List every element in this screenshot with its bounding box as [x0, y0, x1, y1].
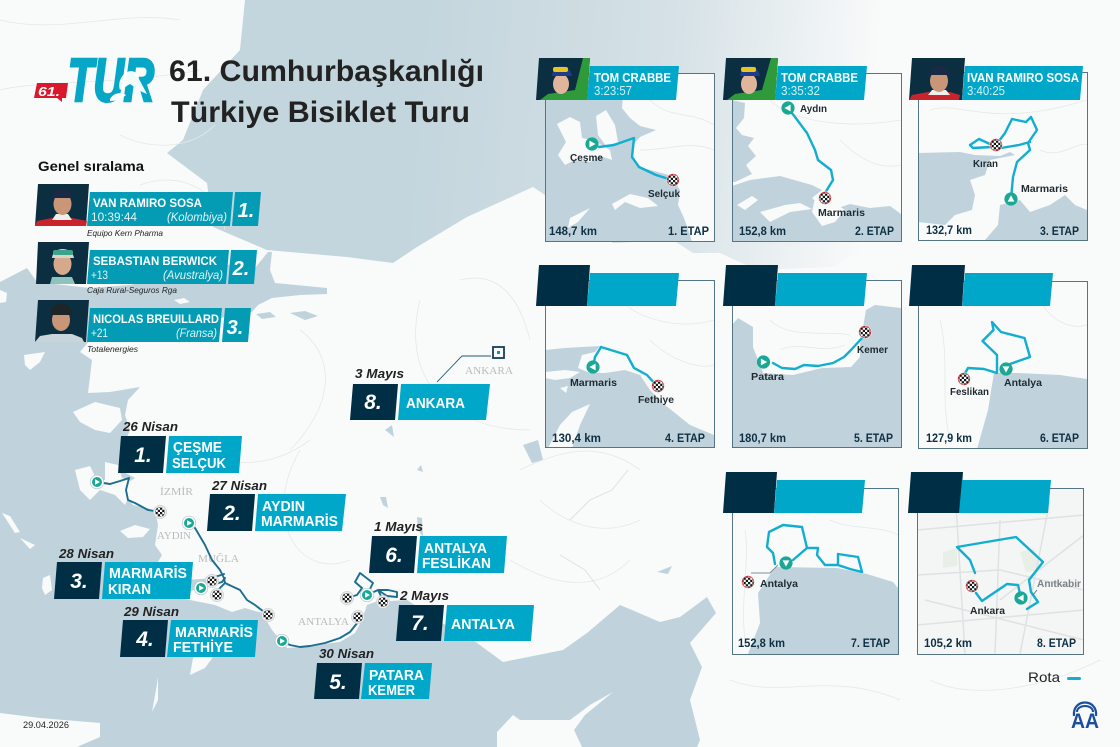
route: Patara to Kemer: [773, 338, 862, 369]
callout: stage 5: [314, 646, 432, 699]
callout: stage 8: 8.: [364, 391, 382, 414]
panel: stage 1: 148,7 km: [549, 226, 597, 238]
panel: stage 6: 6. ETAP: [1040, 433, 1079, 445]
photo: Ivan Ramiro Sosa: [909, 58, 965, 100]
callout: stage 5: 30 Nisan: [319, 646, 374, 661]
callout: stage 4: FETHİYE: [173, 639, 233, 656]
panel: stage 8: 105,2 km: [924, 638, 972, 650]
photo: Nicolas Breuillard: [35, 300, 89, 342]
panel: stage 1: 1. ETAP: [668, 226, 709, 238]
callout: stage 5: KEMER: [368, 682, 415, 699]
panel: stage 2: 2. ETAP: [855, 226, 894, 238]
panel: general classification rider 1: [35, 184, 261, 238]
panel: general classification rider 3: Totalenergies: [87, 344, 139, 354]
header: stage 3 winner: [962, 66, 1083, 100]
title: Türkiye Bisiklet Turu: [171, 96, 470, 129]
panel: stage 5: [723, 265, 902, 448]
panel: stage 7: 152,8 km: [738, 638, 785, 650]
header: stage 2 winner: 3:35:32: [781, 84, 820, 98]
panel: stage 8: Ankara: [970, 605, 1005, 617]
legend: route: [1028, 669, 1081, 685]
panel: stage 5: Patara: [751, 371, 784, 383]
callout: stage 2: MARMARİS: [261, 513, 338, 530]
callout: stage 4: MARMARİS: [175, 624, 253, 641]
route: Antalya loops: [767, 525, 862, 572]
marker: stage 3 start: [194, 581, 208, 595]
callout: stage 7: 2 Mayıs: [399, 588, 449, 603]
panel: general classification rider 2: [36, 242, 257, 295]
panel: stage 4: [536, 265, 714, 448]
marker: finish: [651, 379, 665, 393]
panel: stage 3: 132,7 km: [926, 225, 972, 237]
marker: start: [999, 362, 1013, 376]
panel: stage 6: Feslikan: [950, 386, 989, 398]
header: stage 2 winner: [775, 66, 867, 100]
panel: stage 6: Antalya: [1004, 377, 1042, 389]
panel: stage 1: Çeşme: [570, 152, 603, 164]
callout: stage 1: 1.: [134, 444, 152, 467]
header: stage 1 winner: [587, 66, 679, 100]
marker: stage 2 finish: [210, 588, 224, 602]
panel: stage 6: 127,9 km: [926, 433, 972, 445]
panel: stage 7: 7. ETAP: [851, 638, 890, 650]
callout: stage 6: [369, 519, 507, 573]
marker: finish: [818, 191, 832, 205]
marker: finish: [957, 372, 971, 386]
province label: Aydın: AYDIN: [157, 530, 191, 542]
header: stage 3 winner: 3:40:25: [967, 84, 1005, 98]
callout: stage 6: 1 Mayıs: [374, 519, 423, 534]
callout: stage 6: 6.: [385, 544, 403, 567]
callout: stage 4: 4.: [135, 628, 154, 651]
panel: stage 3: Marmaris: [1021, 183, 1068, 195]
callout: stage 5: PATARA: [369, 667, 424, 684]
callout: stage 3: KIRAN: [108, 581, 151, 598]
Ankara marker with leader line: [437, 347, 504, 382]
callout: stage 2: [207, 478, 346, 531]
panel: general classification rider 2: (Avustralya): [163, 270, 223, 282]
header: stage 1 winner: TOM CRABBE: [594, 70, 671, 85]
header: stage 6 dark block: [909, 265, 965, 306]
panel: stage 6: [909, 265, 1088, 449]
panel: stage 5: 180,7 km: [739, 433, 786, 445]
marker: stage 7 finish: [376, 595, 390, 609]
marker: finish: [666, 173, 680, 187]
marker: start: [1004, 192, 1018, 206]
photo: Ivan Ramiro Sosa: [35, 184, 89, 226]
header: stage 8 blue block: [959, 480, 1051, 513]
title: [169, 55, 484, 129]
panel: stage 5: Kemer: [857, 344, 888, 356]
panel: general classification rider 2: 2.: [232, 258, 249, 280]
marker: start: [781, 101, 795, 115]
panel: stage 8: [908, 472, 1084, 654]
panel: stage 2: Marmaris: [818, 207, 865, 219]
panel: stage 4: 4. ETAP: [665, 433, 705, 445]
province label: İzmir: İZMİR: [160, 486, 194, 498]
callout: stage 4: [120, 604, 258, 657]
panel: stage 8: Anıtkabir: [1037, 578, 1081, 590]
panel: general classification rider 3: [35, 300, 251, 354]
panel: stage 4: 130,4 km: [552, 433, 601, 445]
callout: stage 7: 7.: [411, 612, 429, 635]
route overview on main map: [90, 475, 397, 648]
panel: general classification rider 3: (Fransa): [176, 328, 217, 340]
callout: stage 8: [350, 366, 490, 420]
panel: general classification rider 1: Equipo Kern Pharma: [87, 228, 163, 238]
province label: Ankara: ANKARA: [465, 365, 513, 377]
callout: stage 8: 3 Mayıs: [355, 366, 404, 381]
logo: 61. Tur: [34, 47, 154, 114]
route: Çeşme to Selçuk: [599, 138, 672, 180]
panel: general classification rider 3: +21: [91, 326, 108, 340]
header: stage 4 blue block: [587, 273, 679, 306]
marker: finish: [858, 325, 872, 339]
header: stage 2 winner: TOM CRABBE: [781, 70, 858, 85]
callout: stage 6: FESLİKAN: [422, 555, 491, 572]
panel: general classification rider 2: +13: [91, 268, 108, 282]
callout: stage 3: [54, 546, 193, 599]
marker: stage 1 finish: [153, 505, 167, 519]
photo: Tom Crabbe: [723, 58, 778, 100]
logo: 61. Tur: 61.: [38, 84, 60, 99]
marker: start: [779, 556, 793, 570]
panel: general classification rider 2: Caja Rural-Seguros Rga: [87, 285, 177, 295]
callout: stage 8: ANKARA: [406, 395, 465, 412]
header: stage 3 winner: IVAN RAMIRO SOSA: [967, 70, 1080, 85]
callout: stage 2: AYDIN: [262, 498, 305, 515]
panel: general classification rider 1: 10:39:44: [91, 210, 137, 224]
marker: start: [585, 137, 599, 151]
date: 29.04.2026: [23, 720, 69, 730]
title: 61. Cumhurbaşkanlığı: [169, 55, 484, 88]
heading: general classification: Genel sıralama: [38, 158, 144, 174]
marker: stage 4 finish: [261, 608, 275, 622]
route: Aydın to Marmaris: [788, 108, 833, 193]
header: stage 8 dark block: [908, 472, 963, 513]
panel: stage 2: [723, 58, 902, 242]
header: stage 6 blue block: [962, 273, 1053, 306]
header: stage 4 dark block: [536, 265, 590, 306]
marker: start: [586, 360, 600, 374]
logo: 61. Tur: TUR: [68, 47, 154, 114]
leader: Anıtkabir: [1033, 590, 1037, 595]
marker: start: [1014, 591, 1028, 605]
panel: stage 4: Fethiye: [638, 394, 674, 406]
panel: stage 3: Kıran: [973, 158, 998, 170]
panel: general classification rider 3: 3.: [227, 317, 243, 339]
marker: stage 5 start: [275, 634, 289, 648]
callout: stage 1: 26 Nisan: [122, 419, 178, 434]
callout: stage 1: SELÇUK: [172, 455, 226, 472]
panel: general classification rider 3: NICOLAS BREUILLARD: [93, 312, 219, 326]
marker: stage 6 start: [360, 588, 374, 602]
header: stage 5 dark block: [723, 265, 778, 306]
route: Marmaris to Kıran: [970, 117, 1037, 199]
photo: Tom Crabbe: [536, 58, 590, 100]
callout: stage 5: 5.: [329, 671, 347, 694]
marker: finish: [989, 138, 1003, 152]
panel: general classification rider 1: VAN RAMIRO SOSA: [93, 196, 202, 210]
callout: stage 3: MARMARİS: [109, 565, 187, 582]
callout: stage 2: 27 Nisan: [211, 478, 267, 493]
route: Marmaris to Fethiye: [593, 347, 656, 385]
panel: stage 4: Marmaris: [570, 377, 617, 389]
marker: stage 6 finish: [340, 591, 354, 605]
route: Ankara loop: [957, 537, 1043, 609]
panel: general classification rider 1: 1.: [238, 200, 254, 222]
marker: stage 5 finish: [351, 610, 365, 624]
legend: route: Rota: [1028, 669, 1060, 685]
callout: stage 2: 2.: [222, 502, 241, 525]
panel: stage 1: [536, 58, 714, 242]
marker: stage 3 finish: [205, 574, 219, 588]
photo: Sebastian Berwick: [36, 242, 89, 284]
province label: Antalya: ANTALYA: [298, 616, 349, 628]
logo: Anadolu Agency: AA: [1071, 710, 1099, 733]
panel: stage 3: [909, 58, 1088, 240]
panel: stage 7: [723, 472, 898, 654]
callout: stage 3: 3.: [70, 570, 88, 593]
header: stage 1 winner: 3:23:57: [594, 84, 632, 98]
marker: stage 2 start: [182, 516, 196, 530]
panel: stage 7: Antalya: [760, 578, 798, 590]
marker: start: [757, 355, 770, 369]
header: stage 5 blue block: [775, 273, 867, 306]
panel: stage 3: 3. ETAP: [1040, 226, 1079, 238]
header: stage 7 blue block: [774, 480, 865, 513]
panel: stage 5: 5. ETAP: [854, 433, 893, 445]
panel: stage 2: Aydın: [800, 103, 827, 115]
callout: stage 7: [396, 588, 534, 641]
panel: general classification rider 2: SEBASTIAN BERWICK: [93, 254, 217, 268]
callout: stage 6: ANTALYA: [424, 540, 487, 557]
header: stage 7 dark block: [723, 472, 777, 513]
callout: stage 1: ÇEŞME: [173, 439, 222, 456]
callout: stage 7: ANTALYA: [451, 616, 515, 633]
panel: stage 2: 152,8 km: [739, 226, 786, 238]
marker: stage 1 start: [90, 475, 104, 489]
route: Antalya to Feslikan: [964, 322, 1030, 375]
leader: finish: [751, 565, 778, 573]
panel: stage 1: Selçuk: [648, 188, 680, 200]
callout: stage 4: 29 Nisan: [123, 604, 179, 619]
callout: stage 1: [118, 419, 242, 473]
callout: stage 3: 28 Nisan: [58, 546, 114, 561]
marker: finish: [741, 575, 755, 589]
province label: Muğla: MUĞLA: [198, 553, 239, 565]
panel: stage 8: 8. ETAP: [1037, 638, 1076, 650]
marker: finish: [965, 579, 979, 593]
panel: general classification rider 1: (Kolombiya): [167, 212, 227, 224]
